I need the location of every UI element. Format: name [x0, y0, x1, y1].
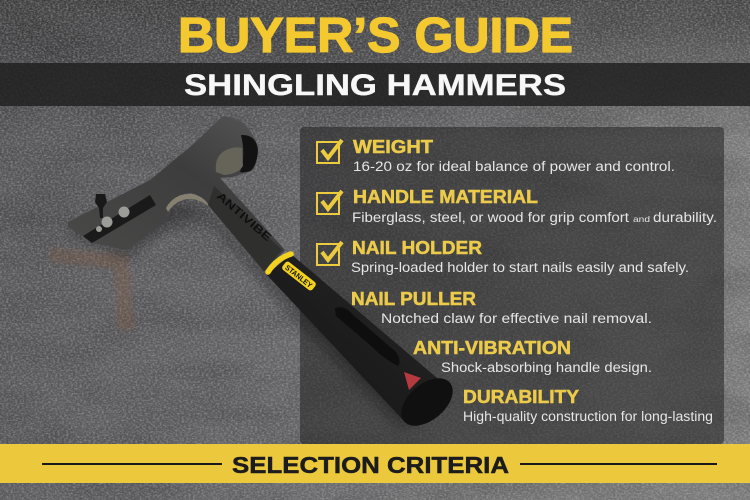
text panel — [300, 127, 724, 444]
yellow collar — [268, 254, 291, 272]
description: handle material: Fiberglass, steel, or wood for grip comfort — [352, 210, 629, 225]
criterion: durability — [463, 387, 713, 424]
heading: anti-vibration: ANTI-VIBRATION — [413, 338, 571, 358]
rivets — [96, 206, 130, 232]
heading: durability: DURABILITY — [463, 387, 579, 407]
neck highlight — [166, 194, 210, 212]
hammer illustration — [68, 116, 462, 435]
hammer head — [68, 116, 285, 272]
grip end cap — [392, 369, 462, 435]
criterion: anti-vibration — [413, 338, 652, 375]
criterion: nail puller — [351, 289, 652, 326]
hammer face — [240, 135, 258, 172]
heading: nail holder: NAIL HOLDER — [352, 238, 482, 258]
grip — [267, 254, 447, 421]
checkbox: weight — [317, 140, 342, 163]
shank lettering: ANTIVIBE — [214, 190, 273, 244]
subtitle: SHINGLING HAMMERS — [184, 69, 566, 102]
description: handle material: durability. — [653, 210, 717, 225]
claw cutout highlight — [216, 147, 243, 175]
heading: handle material: HANDLE MATERIAL — [353, 187, 538, 207]
checkbox: nail holder — [317, 242, 342, 265]
description: nail holder: Spring-loaded holder to start nails easily and safely. — [351, 260, 689, 275]
hammer shadow — [68, 195, 425, 426]
grip texture — [335, 307, 400, 366]
criterion: handle material — [317, 187, 717, 225]
description: anti-vibration: Shock-absorbing handle design. — [441, 360, 652, 375]
description: handle material: and — [633, 214, 650, 224]
nail holder — [95, 194, 107, 218]
red triangle — [404, 372, 421, 390]
blade plate — [83, 195, 156, 243]
bottom banner — [0, 444, 750, 483]
heading: weight: WEIGHT — [353, 137, 433, 157]
criterion: weight — [317, 137, 675, 174]
Stanley label: STANLEY — [283, 263, 314, 290]
description: durability: High-quality construction for long-lasting — [463, 409, 713, 424]
rust stain — [50, 248, 135, 330]
checkbox: handle material — [317, 191, 342, 214]
title: BUYER’S GUIDE — [178, 9, 573, 63]
description: weight: 16-20 oz for ideal balance of power and control. — [353, 159, 675, 174]
subtitle band — [0, 63, 750, 106]
banner text: SELECTION CRITERIA — [232, 452, 509, 478]
shank — [208, 186, 282, 271]
criterion: nail holder — [317, 238, 689, 275]
description: nail puller: Notched claw for effective nail removal. — [381, 311, 652, 326]
heading: nail puller: NAIL PULLER — [351, 289, 476, 309]
